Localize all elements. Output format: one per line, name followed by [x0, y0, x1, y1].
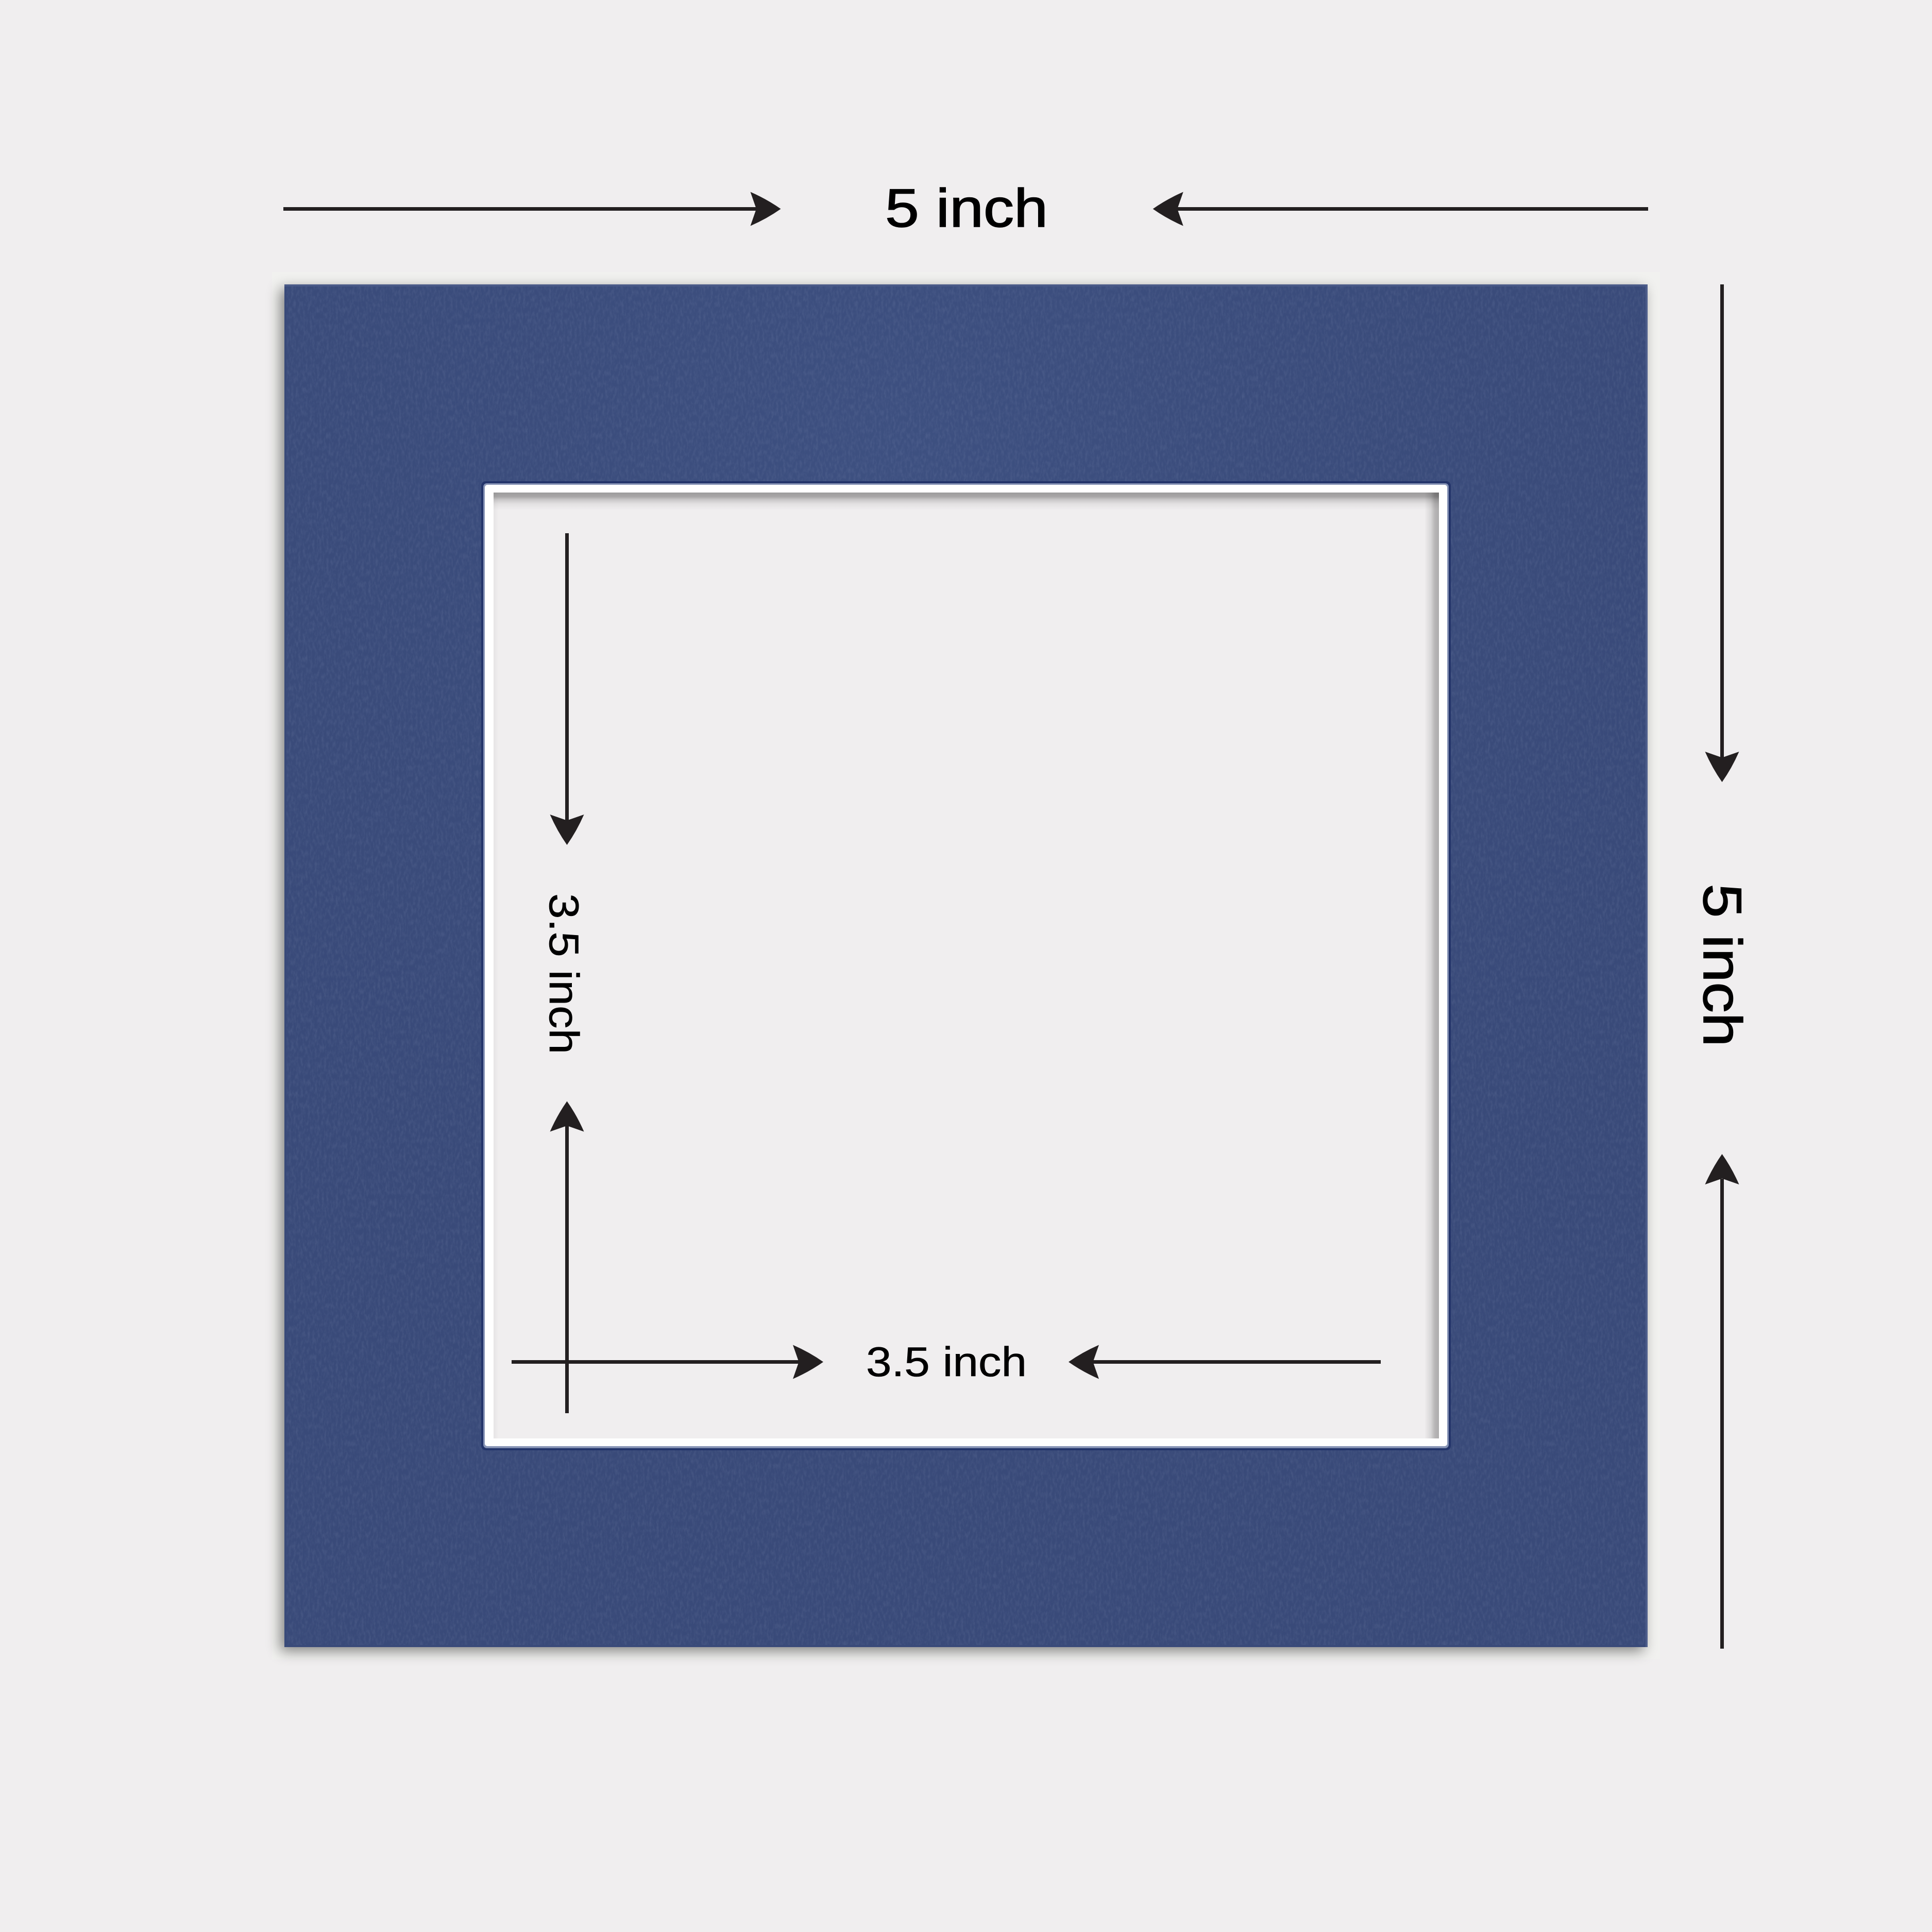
arrow: right height, pointing down [1705, 284, 1739, 782]
label: inner horizontal 3.5 inch: 3.5 inch [866, 1339, 1027, 1385]
mat opening: light bevel [483, 483, 1449, 1448]
arrow: top width, pointing right [283, 192, 781, 226]
arrow: inner width, pointing right [512, 1345, 823, 1379]
window with inner shadow [494, 493, 1439, 1438]
arrow: inner height, pointing up [550, 1101, 584, 1413]
arrow: right height, pointing up [1705, 1154, 1739, 1649]
label: top 5 inch: 5 inch [885, 178, 1048, 239]
mat opening: dark bevel edge [481, 481, 1451, 1450]
panel: navy blue mat board [284, 284, 1648, 1647]
white inner mat border [485, 485, 1447, 1446]
label: inner vertical 3.5 inch: 3.5 inch [540, 893, 587, 1054]
arrow: inner height, pointing down [550, 533, 584, 845]
label: right 5 inch: 5 inch [1692, 884, 1752, 1047]
arrow: top width, pointing left [1153, 192, 1648, 226]
arrow: inner width, pointing left [1069, 1345, 1381, 1379]
